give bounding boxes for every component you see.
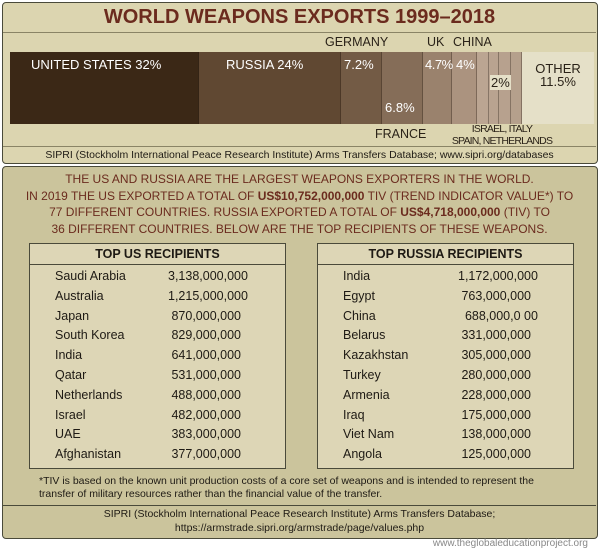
- table: Russia recipients: Kazakhstan: [343, 348, 408, 362]
- table: Russia recipients: Angola: [343, 447, 382, 461]
- country labels: GERMANY: [325, 35, 388, 49]
- source: https://armstrade.sipri.org/armstrade/page/values.php: [175, 522, 424, 534]
- panel: top chart: FRANCE: [375, 127, 426, 141]
- stacked bar chart: 2%: [491, 75, 510, 90]
- intro text: [26, 172, 573, 236]
- intro text: 36 DIFFERENT COUNTRIES. BELOW ARE THE TOP RECIPIENTS OF THESE WEAPONS.: [51, 222, 548, 236]
- table: US recipients: 829,000,000: [171, 328, 241, 342]
- table: US recipients: Israel: [55, 408, 86, 422]
- title: WORLD WEAPONS EXPORTS 1999–2018: [104, 6, 495, 28]
- stacked bar chart: 4%: [456, 57, 475, 72]
- table: Russia recipients: 763,000,000: [461, 289, 531, 303]
- stacked bar chart: 4.7%: [425, 57, 453, 72]
- table: Russia recipients: Belarus: [343, 328, 385, 342]
- table: Russia recipients: Viet Nam: [343, 427, 394, 441]
- table: Russia recipients: Iraq: [343, 408, 365, 422]
- table: US recipients: 482,000,000: [171, 408, 241, 422]
- table: US recipients: 641,000,000: [171, 348, 241, 362]
- table: Russia recipients: 1,172,000,000: [458, 269, 538, 283]
- table: US recipients: Saudi Arabia: [55, 269, 126, 283]
- table: US recipients: 870,000,000: [171, 309, 241, 323]
- table: US recipients: Australia: [55, 289, 104, 303]
- source: [3, 505, 596, 537]
- intro text: 77 DIFFERENT COUNTRIES. RUSSIA EXPORTED A TOTAL OF US$4,718,000,000 (TIV) TO: [49, 205, 550, 219]
- table: US recipients: India: [55, 348, 82, 362]
- source line: SIPRI (Stockholm International Peace Research Institute) Arms Transfers Database; www.sipri.org/databases: [45, 149, 554, 161]
- table: US recipients: 1,215,000,000: [168, 289, 248, 303]
- title: [3, 3, 596, 33]
- table: Russia recipients: India: [343, 269, 370, 283]
- source line: [3, 146, 596, 163]
- panel: top chart: UK: [427, 35, 444, 49]
- table: US recipients: Afghanistan: [55, 447, 121, 461]
- table: Russia recipients: Turkey: [343, 368, 381, 382]
- stacked bar chart: UNITED STATES 32%: [31, 57, 161, 72]
- table: Russia recipients: 228,000,000: [461, 388, 531, 402]
- stacked bar chart: 11.5%: [540, 74, 576, 89]
- table: Russia recipients: Armenia: [343, 388, 390, 402]
- table: Russia recipients: Egypt: [343, 289, 375, 303]
- table: US recipients: South Korea: [55, 328, 124, 342]
- table: Russia recipients: 175,000,000: [461, 408, 531, 422]
- panel: recipients: [2, 166, 598, 539]
- table: US recipients: 488,000,000: [171, 388, 241, 402]
- table: US recipients: UAE: [55, 427, 81, 441]
- stacked bar chart: [10, 52, 594, 124]
- table: Russia recipients: [317, 243, 574, 469]
- intro text: THE US AND RUSSIA ARE THE LARGEST WEAPONS EXPORTERS IN THE WORLD.: [65, 172, 534, 186]
- table: Russia recipients: China: [343, 309, 376, 323]
- table: US recipients: 531,000,000: [171, 368, 241, 382]
- panel: top chart: CHINA: [453, 35, 492, 49]
- table: Russia recipients: 688,000,0 00: [465, 309, 538, 323]
- footnote: [39, 475, 534, 500]
- credit: www.theglobaleducationproject.org: [433, 538, 588, 549]
- table: US recipients: [29, 243, 286, 469]
- table: US recipients: TOP US RECIPIENTS: [95, 247, 220, 261]
- table: US recipients: 3,138,000,000: [168, 269, 248, 283]
- stacked bar chart: 6.8%: [385, 100, 415, 115]
- panel: top chart: SPAIN, NETHERLANDS: [452, 135, 552, 147]
- table: US recipients: 377,000,000: [171, 447, 241, 461]
- table: Russia recipients: 305,000,000: [461, 348, 531, 362]
- footnote: transfer of military resources rather than the financial value of the transfer.: [39, 488, 382, 500]
- table: Russia recipients: 138,000,000: [461, 427, 531, 441]
- stacked bar chart: OTHER: [535, 61, 581, 76]
- panel: top chart: ISRAEL, ITALY: [472, 123, 532, 135]
- footnote: *TIV is based on the known unit production costs of a core set of weapons and is intended to represent the: [39, 475, 534, 487]
- table: US recipients: Qatar: [55, 368, 86, 382]
- intro text: IN 2019 THE US EXPORTED A TOTAL OF US$10,752,000,000 TIV (TREND INDICATOR VALUE*) TO: [26, 189, 573, 203]
- table: Russia recipients: 331,000,000: [461, 328, 531, 342]
- table: Russia recipients: 125,000,000: [461, 447, 531, 461]
- source: SIPRI (Stockholm International Peace Research Institute) Arms Transfers Database;: [104, 508, 495, 520]
- table: US recipients: 383,000,000: [171, 427, 241, 441]
- table: Russia recipients: TOP RUSSIA RECIPIENTS: [369, 247, 522, 261]
- stacked bar chart: RUSSIA 24%: [226, 57, 303, 72]
- table: Russia recipients: 280,000,000: [461, 368, 531, 382]
- stacked bar chart: 7.2%: [344, 57, 374, 72]
- table: US recipients: Japan: [55, 309, 89, 323]
- table: US recipients: Netherlands: [55, 388, 122, 402]
- panel: top chart: [2, 2, 598, 164]
